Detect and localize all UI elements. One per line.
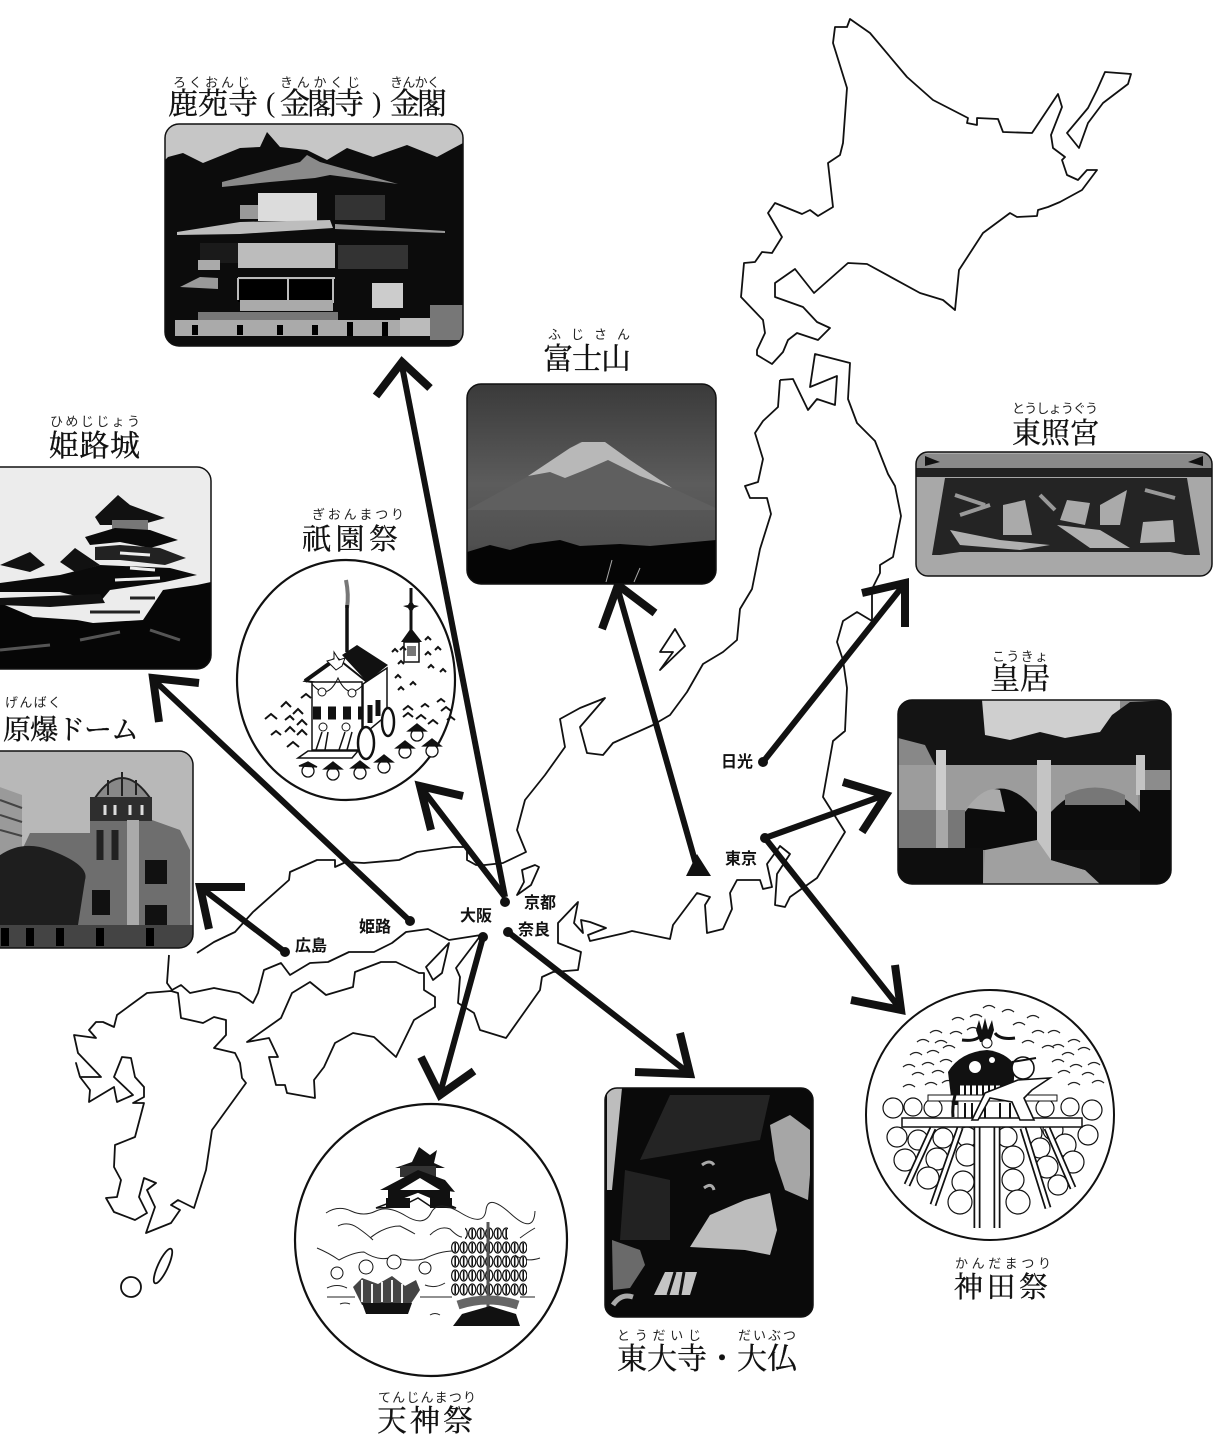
city labels: 奈良 [518, 920, 550, 939]
heading: Himeji Castle [49, 414, 140, 463]
arrow: Tokyo to Kanda festival [765, 838, 901, 1010]
photo: Himeji Castle [0, 467, 211, 669]
heading: Gion festival [302, 507, 404, 556]
heading: Todaiji Great Buddha [617, 1328, 798, 1376]
city labels: 大阪 [460, 907, 492, 925]
arrow: Nikko to Toshogu [763, 583, 905, 762]
heading: Toshogu: とうしょうぐう [1012, 401, 1098, 416]
heading: Atomic Bomb Dome: 原爆ドーム [3, 714, 139, 746]
city labels: 東京 [725, 849, 757, 868]
heading: Gion festival: ぎおんまつり [312, 507, 404, 522]
carrying poles [907, 1125, 1073, 1228]
heading: Kanda festival: かんだまつり [955, 1256, 1051, 1271]
heading: Gion festival: 祇園祭 [302, 523, 398, 556]
arrow: Nara to Todaiji [508, 932, 690, 1074]
heading: Kinkaku: きんかく [390, 75, 440, 90]
city labels: 姫路 [359, 917, 391, 936]
sky arcs [903, 1006, 1104, 1087]
arrow: Himeji to castle [153, 678, 410, 921]
Yakushima island [121, 1277, 141, 1297]
heading: Atomic Bomb Dome [3, 695, 139, 746]
crowd [883, 1098, 1102, 1214]
heading: Atomic Bomb Dome: げんばく [5, 695, 61, 710]
heading: Kinkaku: ろくおんじ [173, 75, 250, 90]
heading: Mt Fuji: ふじさん [548, 327, 630, 342]
arrow: Kyoto to Kinkaku [376, 362, 505, 897]
Tanegashima island [150, 1247, 176, 1285]
Kunashiri island [1067, 72, 1131, 148]
heading: Kinkaku: 鹿苑寺 [168, 88, 258, 121]
heading: Toshogu: 東照宮 [1012, 417, 1099, 450]
illustration: Gion festival [237, 560, 455, 800]
Kyushu [74, 991, 246, 1233]
marker: Mt Fuji triangle [686, 854, 711, 876]
heading: Kinkaku: ( [266, 88, 275, 119]
heading: Mt Fuji [543, 327, 631, 376]
arrow: Tokyo to Imperial Palace [765, 782, 886, 838]
arrow: Kyoto to Gion festival [420, 786, 505, 897]
drum boat [353, 1276, 420, 1314]
city labels: 京都 [524, 894, 556, 912]
castle [376, 1147, 456, 1208]
photo: Kinkaku [165, 124, 463, 346]
heading: Kinkaku: きんかくじ [280, 75, 360, 90]
lantern boat [451, 1222, 527, 1326]
festival crowd marks [265, 637, 455, 747]
heading: Kinkaku: 金閣寺 [280, 88, 364, 121]
festival runner [972, 1057, 1050, 1120]
heading: Kanda festival: 神田祭 [954, 1271, 1048, 1304]
arrow: Osaka to Tenjin festival [421, 937, 483, 1095]
heading: Todaiji Great Buddha: とうだいじ [617, 1328, 701, 1343]
Hokkaido [741, 19, 1097, 364]
heading: Kanda festival [954, 1256, 1051, 1304]
heading: Kinkaku [168, 75, 447, 121]
Honshu [167, 354, 901, 1038]
heading: Mt Fuji: 富士山 [543, 343, 631, 376]
clouds [317, 1202, 540, 1315]
city labels: 日光 [721, 753, 753, 771]
illustration: Tenjin festival [295, 1104, 567, 1376]
heading: Imperial Palace: こうきょ [992, 649, 1048, 664]
city labels [295, 753, 757, 955]
photo: Todaiji Great Buddha [605, 1088, 813, 1317]
heading: Kinkaku: 金閣 [390, 88, 447, 121]
heading: Himeji Castle: ひめじじょう [50, 414, 140, 429]
arrows [153, 362, 905, 1095]
photo: Imperial Palace bridge [898, 700, 1171, 884]
mikoshi [902, 1018, 1082, 1127]
Awaji island [426, 943, 449, 980]
heading: Todaiji Great Buddha: 東大寺・大仏 [617, 1343, 798, 1376]
Sado island [660, 629, 685, 670]
small float tower [401, 588, 422, 662]
heading: Himeji Castle: 姫路城 [49, 430, 140, 463]
festival people [299, 724, 441, 780]
city dots [280, 757, 770, 957]
Lake Biwa [517, 865, 539, 895]
city labels: 広島 [295, 936, 327, 955]
photo: Mt Fuji [467, 384, 720, 584]
flame lanterns [331, 1255, 431, 1279]
heading: Tenjin festival [377, 1390, 476, 1438]
heading: Tenjin festival: てんじんまつり [378, 1390, 476, 1405]
arrow: Mt Fuji [602, 585, 697, 868]
photo: Atomic Bomb Dome [0, 751, 193, 948]
heading: Imperial Palace: 皇居 [990, 663, 1050, 696]
illustration: Kanda festival [866, 990, 1114, 1240]
photo: Toshogu carving [916, 452, 1212, 576]
heading: Kinkaku: ) [372, 88, 381, 119]
map of Japan [74, 19, 1131, 1297]
Gion float [298, 580, 394, 759]
arrow: Hiroshima to dome [200, 887, 285, 952]
heading: Todaiji Great Buddha: だいぶつ [738, 1328, 796, 1343]
Shikoku [247, 962, 435, 1098]
heading: Tenjin festival: 天神祭 [377, 1405, 473, 1438]
heading: Toshogu [1012, 401, 1099, 450]
